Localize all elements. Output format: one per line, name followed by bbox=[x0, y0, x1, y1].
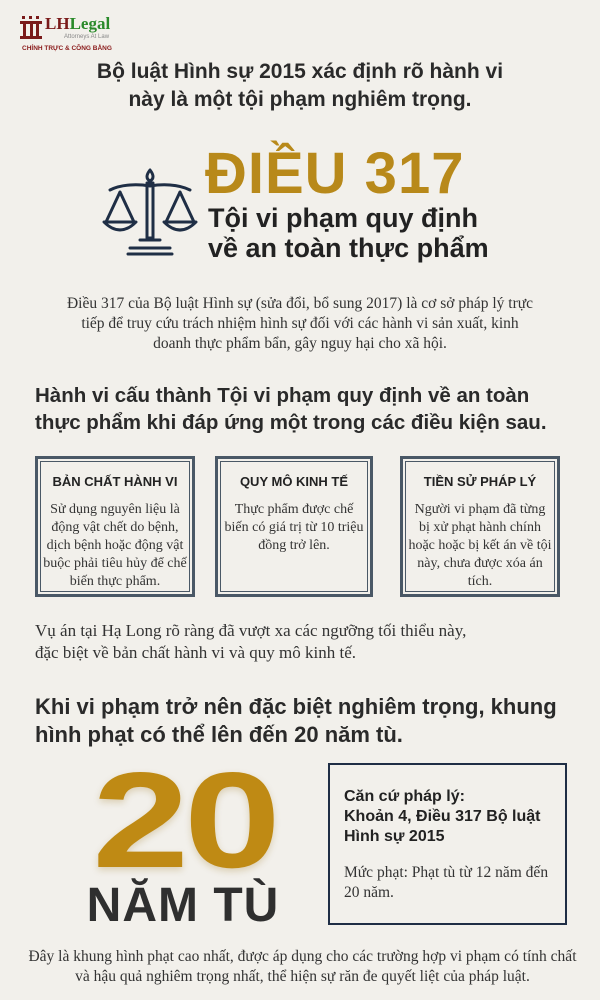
panel: nature of act bbox=[35, 456, 195, 597]
panel: economic scale: Thực phẩm được chế biến có giá trị từ 10 triệu đồng trở lên. bbox=[224, 502, 364, 553]
icon: logo mark bbox=[20, 16, 42, 39]
text: Ha Long case bbox=[35, 621, 466, 662]
label: nam tu: NĂM TÙ bbox=[87, 879, 279, 932]
logo: CHÍNH TRỰC & CÔNG BẰNG bbox=[22, 45, 112, 52]
panel: nature of act: BẢN CHẤT HÀNH VI bbox=[53, 474, 177, 489]
logo bbox=[20, 14, 112, 52]
panel: nature of act: Sử dụng nguyên liệu là động vật chết do bệnh, dịch bệnh hoặc động vật buộc phải tiêu hủy để chế biến thực phẩm. bbox=[43, 502, 187, 589]
text: description: Điều 317 của Bộ luật Hình sự (sửa đổi, bổ sung 2017) là cơ sở pháp lý trực tiếp để truy cứu trách nhiệm hình sự đối với các hành vi sản xuất, kinh doanh thực phẩm bẩn, gây nguy hại cho xã hội. bbox=[67, 295, 533, 352]
logo: LHLegal bbox=[45, 14, 110, 33]
heading: intro: Bộ luật Hình sự 2015 xác định rõ hành vi này là một tội phạm nghiêm trọng. bbox=[97, 60, 503, 111]
callout: legal basis bbox=[328, 763, 567, 925]
text: Ha Long case: Vụ án tại Hạ Long rõ ràng đã vượt xa các ngưỡng tối thiểu này, bbox=[35, 621, 466, 640]
subtitle: về an toàn thực phẩm bbox=[208, 233, 489, 263]
text: Ha Long case: đặc biệt về bản chất hành vi và quy mô kinh tế. bbox=[35, 643, 356, 662]
panel: legal history: Người vi phạm đã từng bị xử phạt hành chính hoặc hoặc bị kết án về tội này, chưa được xóa án tích. bbox=[408, 502, 552, 589]
title: Dieu 317: ĐIỀU 317 bbox=[205, 141, 464, 206]
icon: scales of justice bbox=[102, 168, 198, 256]
panel: legal history bbox=[400, 456, 560, 597]
heading: penalty: Khi vi phạm trở nên đặc biệt nghiêm trọng, khung hình phạt có thể lên đến 20 năm tù. bbox=[35, 694, 557, 747]
text: conclusion: Đây là khung hình phạt cao nhất, được áp dụng cho các trường hợp vi phạm có tính chất và hậu quả nghiêm trọng nhất, thể hiện sự răn đe quyết liệt của pháp luật. bbox=[28, 948, 576, 985]
heading: conditions: Hành vi cấu thành Tội vi phạm quy định về an toàn thực phẩm khi đáp ứng một trong các điều kiện sau. bbox=[35, 384, 547, 434]
callout: legal basis: Khoản 4, Điều 317 Bộ luật Hình sự 2015 bbox=[344, 808, 540, 845]
panel: economic scale: QUY MÔ KINH TẾ bbox=[240, 474, 348, 489]
panel: legal history: TIỀN SỬ PHÁP LÝ bbox=[424, 474, 536, 489]
subtitle: Tội vi phạm quy định bbox=[208, 203, 478, 233]
callout: legal basis: Căn cứ pháp lý: bbox=[344, 788, 465, 805]
logo: Attorneys At Law bbox=[64, 34, 109, 40]
big number 20: 20 bbox=[92, 744, 276, 896]
panel: economic scale bbox=[215, 456, 373, 597]
subtitle bbox=[208, 203, 489, 263]
callout: legal basis: Mức phạt: Phạt tù từ 12 năm đến 20 năm. bbox=[344, 864, 548, 901]
